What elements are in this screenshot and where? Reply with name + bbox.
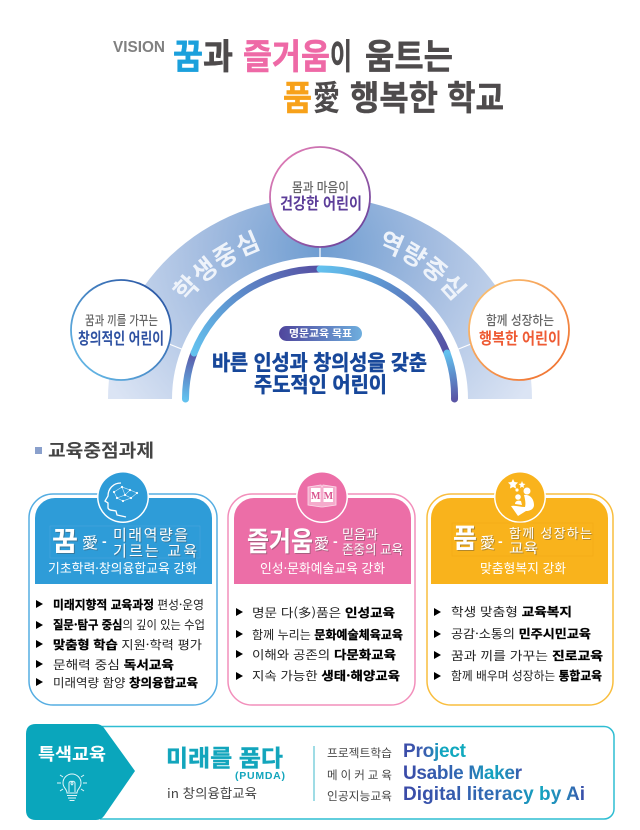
title line 2: 학교: [447, 80, 504, 118]
arrow tag: [26, 724, 135, 820]
card title: 품: [453, 517, 477, 556]
card title: 믿음과: [342, 524, 378, 543]
panel: 꿈 card: [29, 471, 217, 705]
title line 2: [283, 80, 504, 118]
card title: [50, 520, 200, 561]
task list: 문해력 중심 독서교육: [53, 656, 174, 673]
card title: 즐거움: [247, 520, 313, 559]
goal text: [212, 352, 427, 397]
title line 1: 과: [203, 38, 233, 77]
title line 1: 움트는: [365, 38, 453, 77]
card title: -: [498, 533, 503, 549]
title line 2: 행복한: [350, 80, 438, 118]
row: Usable Maker: Usable Maker: [403, 763, 523, 784]
card title: 기르는 교육: [113, 540, 197, 561]
task list: [36, 596, 205, 691]
task list: 함께 배우며 성장하는 통합교육: [451, 667, 602, 684]
task list: 미래역량 함양 창의융합교육: [53, 674, 198, 691]
row: Digital literacy: Digital literacy by Ai: [403, 784, 585, 805]
title line 1: 즐거움: [243, 38, 330, 77]
tag text: 특색교육: [38, 740, 106, 765]
card title: 미래역량을: [113, 524, 188, 545]
task list: 함께 누리는 문화예술체육교육: [252, 626, 403, 643]
task list: 공감·소통의 민주시민교육: [451, 625, 591, 642]
row: Project: Project: [403, 741, 467, 762]
card subtitle: 맞춤형복지 강화: [480, 558, 566, 577]
card title: 愛: [82, 532, 98, 553]
section heading: 교육중점과제: [48, 437, 154, 463]
banner outline: [100, 726, 614, 819]
card title: [452, 517, 593, 558]
circle: 창의적인 어린이: 꿈과 끼를 가꾸는: [85, 310, 158, 329]
row: Usable Maker: 메이커교육: [327, 767, 392, 783]
row: Digital literacy: 인공지능교육: [327, 788, 392, 804]
card title: -: [333, 533, 338, 549]
pill: 명문교육 목표: 명문교육 목표: [289, 325, 352, 340]
icon: book: [296, 471, 348, 523]
row: Usable Maker: [327, 763, 523, 784]
task list: 맞춤형 학습 지원·학력 평가: [53, 636, 202, 653]
task list: 질문·탐구 중심의 깊이 있는 수업: [53, 616, 205, 633]
circle: 건강한 어린이: 몸과 마음이: [292, 177, 349, 196]
card title: 함께 성장하는: [509, 523, 592, 542]
circle: 건강한 어린이: 건강한 어린이: [280, 190, 362, 214]
title line 2: 愛: [313, 80, 340, 118]
row: Project: 프로젝트학습: [327, 745, 392, 761]
task list: [434, 603, 603, 684]
label: VISION: VISION: [113, 39, 165, 56]
program romanization: (PUMDA): [235, 770, 285, 782]
task list: 지속 가능한 생태·해양교육: [252, 667, 400, 684]
goal text: 바른 인성과 창의성을 갖춘: [212, 352, 427, 375]
progress arc: [185, 269, 455, 399]
connector lines: [169, 245, 471, 350]
icon: light bulb: [57, 774, 87, 800]
program field: in 창의융합교육: [167, 783, 257, 802]
circle: 창의적인 어린이: [71, 280, 171, 380]
card title: [247, 520, 403, 559]
card title: 존중의 교육: [342, 539, 403, 558]
icon: book: M: [324, 491, 334, 502]
task list: 미래지향적 교육과정 편성·운영: [53, 596, 204, 613]
card subtitle: 기초학력·창의융합교육 강화: [48, 558, 197, 577]
circle: 건강한 어린이: [270, 147, 370, 247]
circle: 행복한 어린이: [469, 280, 569, 380]
task list: 학생 맞춤형 교육복지: [451, 603, 572, 620]
arch diagram: [70, 146, 570, 402]
pill: 명문교육 목표: [279, 325, 362, 341]
title line 1: [173, 38, 453, 77]
panel: 특색교육: [26, 724, 614, 820]
band label: 학생중심: 학생중심: [172, 230, 260, 298]
title line 1: 이: [330, 38, 352, 77]
circle: 창의적인 어린이: 창의적인 어린이: [78, 325, 164, 349]
task list: 꿈과 끼를 가꾸는 진로교육: [451, 647, 603, 664]
icon: parent and child: [494, 471, 546, 523]
card title: 愛: [314, 533, 329, 554]
card subtitle: 인성·문화예술교육 강화: [260, 558, 385, 577]
icon: head with network: [97, 471, 149, 523]
card title: -: [102, 533, 107, 549]
task list: [236, 604, 403, 684]
task list: 명문 다(多)품은 인성교육: [252, 604, 395, 621]
task list: 이해와 공존의 다문화교육: [252, 646, 396, 663]
title: [113, 38, 504, 118]
icon: book: M: [311, 491, 321, 502]
row: Project: [327, 741, 467, 762]
card title: 愛: [480, 532, 495, 553]
title line 2: 품: [283, 80, 312, 118]
circle: 행복한 어린이: 함께 성장하는: [486, 310, 554, 329]
panel: 즐거움 card: [228, 471, 415, 705]
band label: 역량중심: 역량중심: [383, 232, 468, 301]
card title: 교육: [509, 538, 538, 558]
goal text: 주도적인 어린이: [254, 374, 387, 397]
arch band: [108, 197, 532, 399]
panel: 품 card: [427, 471, 613, 705]
circle: 행복한 어린이: 행복한 어린이: [479, 325, 561, 349]
title line 1: 꿈: [173, 38, 203, 77]
card title: 꿈: [52, 520, 78, 559]
program name: 미래를 품다: [166, 739, 283, 773]
